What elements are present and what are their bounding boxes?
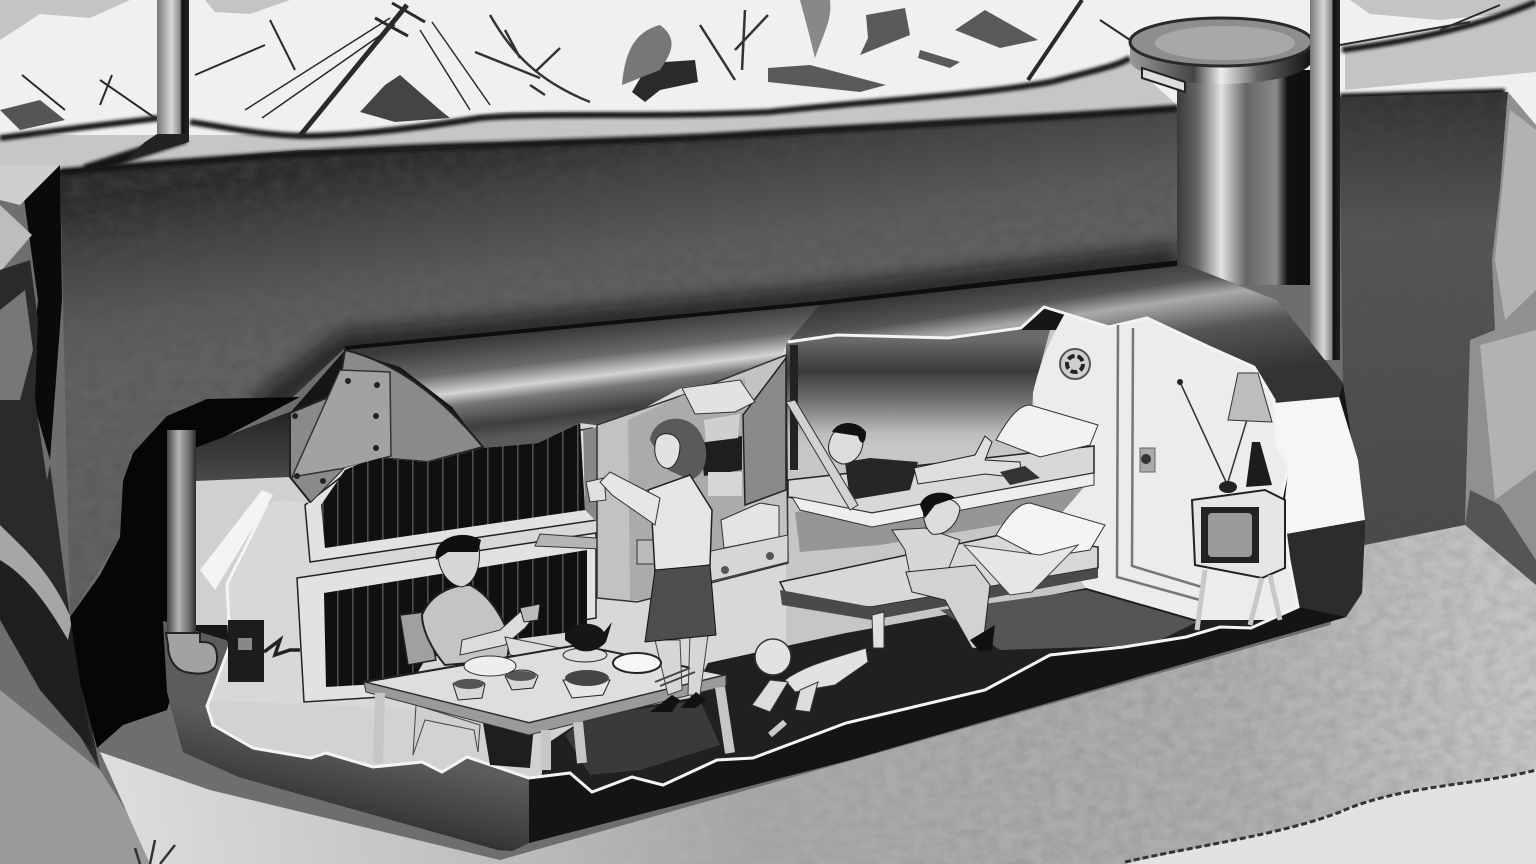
burnt bush [622,25,672,85]
vent pipe right [1310,0,1340,360]
dark room floor [540,588,1300,800]
floor stipple [804,526,1536,864]
cave opening behind shelter [70,397,300,748]
woman standing [600,419,716,712]
interior right room wall [786,330,1086,650]
pit floor [100,525,1536,864]
wall pipe with elbow [166,430,217,674]
contact line above shell [345,263,1180,349]
riveted bracket [290,350,483,503]
left room floor [205,630,860,800]
surface landscape with ruins [0,0,1536,200]
hatch cylinder [1130,18,1315,285]
grass tuft front left [135,840,175,864]
interior cut edge highlight [207,307,1298,792]
baby crawling [752,639,868,735]
right room end wall [1033,314,1296,620]
door [1117,325,1205,600]
black crevice [20,165,62,460]
wrecked car [632,60,698,102]
vent pipe left [125,0,189,160]
bare tree [475,10,768,102]
rug under table [565,700,720,775]
dark wall behind left end [195,408,300,482]
dark grass lines [0,2,1536,170]
soil texture [68,148,594,512]
upper shell left [345,305,820,448]
chair [400,612,480,755]
porthole [1060,349,1090,379]
soil wall right section [1339,92,1508,545]
lit tank end [195,477,311,625]
right room ceiling [786,330,1050,434]
fallen poles and wires [22,0,1500,137]
grass patch front right [1125,770,1536,864]
bottom shell left [163,621,529,851]
interior rooms [200,300,1300,800]
lower end shell [1281,520,1365,617]
soil texture right [1335,90,1515,550]
shadow under top bunk [795,487,1084,552]
table [364,645,730,770]
upper bunk with boy [786,400,1098,527]
upper rack [305,428,597,562]
television set [1177,373,1285,630]
brick rubble [768,8,1038,92]
table lamp [1228,373,1272,422]
bright end band [1274,397,1365,535]
wall battery racks [297,420,624,702]
man seated [422,535,570,768]
lower rack [297,533,596,702]
tank outer shell [163,265,1365,851]
shadow above shell [260,258,1180,410]
bottom shell right [529,607,1346,843]
floor sheen by door [940,590,1197,650]
generator with crank [228,620,300,682]
interior left room wall [210,342,788,710]
tableware [453,622,695,700]
soil wall behind shelter [60,108,1190,617]
left rock wall [0,165,160,864]
rattle [770,722,785,735]
upper shell right [788,265,1343,405]
right rock wall [1465,92,1536,590]
pantry cabinet [586,355,788,602]
ruined house [360,75,450,122]
lower bunk with girl [780,493,1105,652]
soil top edge [60,108,1178,172]
